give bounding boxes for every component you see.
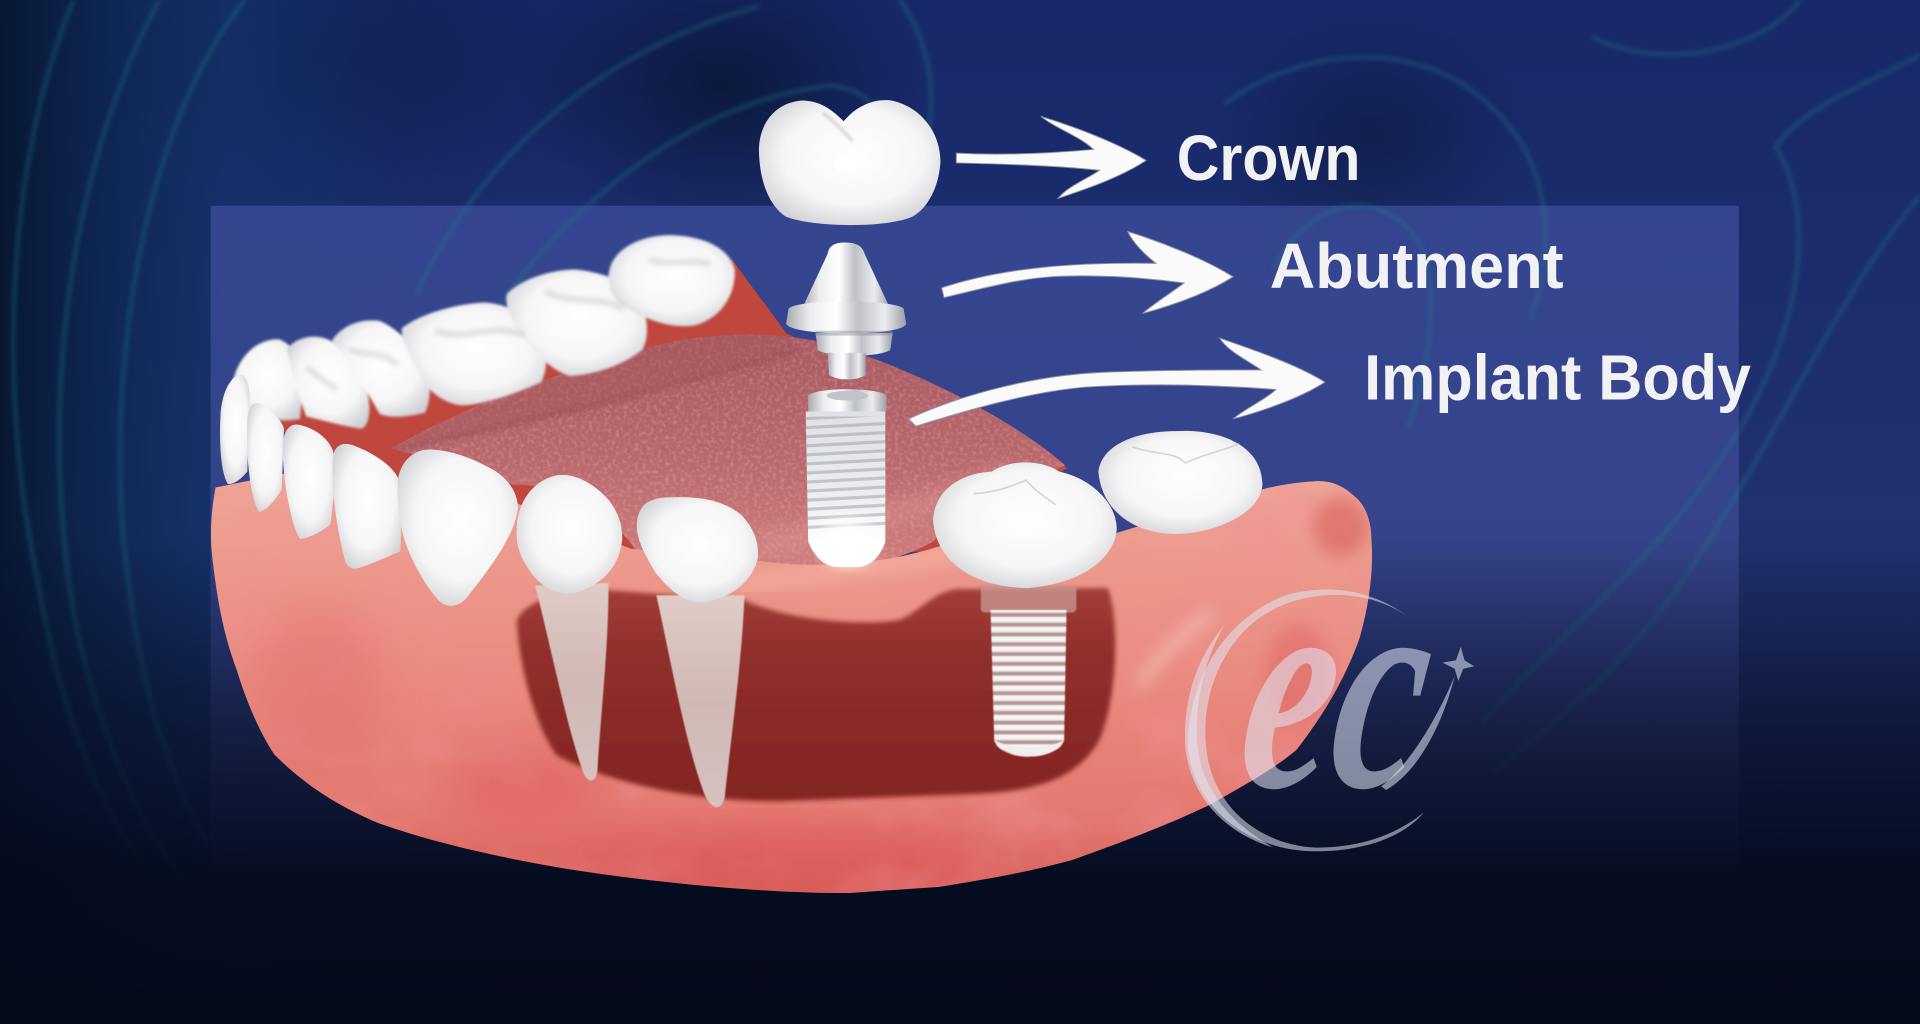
arrow: crown (956, 116, 1146, 198)
premolar one (517, 475, 622, 594)
crown on jaw implant (933, 462, 1117, 588)
logo watermark (1185, 525, 1474, 851)
lighter background panel (211, 206, 1739, 867)
back teeth row (231, 235, 735, 429)
distant molar (1098, 431, 1262, 534)
bottom dark fade (0, 539, 1920, 1024)
abutment (786, 243, 906, 379)
arrow: abutment (942, 232, 1233, 314)
inner gum behind teeth (245, 260, 1068, 563)
tongue (392, 334, 1066, 565)
dark red cutaway window (517, 588, 1115, 801)
tooth root right (656, 595, 744, 807)
exploded crown (759, 100, 940, 225)
canine (398, 449, 518, 606)
logo letters: ec (1225, 525, 1452, 851)
label: Abutment: Abutment (1270, 231, 1564, 302)
front teeth row (220, 375, 1262, 606)
implant in jaw (981, 585, 1076, 757)
premolar two (637, 497, 758, 603)
implant body (806, 389, 887, 567)
incisors (220, 375, 401, 569)
label: Implant Body: Implant Body (1364, 342, 1752, 413)
tooth root left (535, 583, 609, 781)
arrow: implant body (909, 338, 1325, 426)
gum body (196, 465, 1396, 906)
logo tail and star (1381, 647, 1474, 790)
label: Crown: Crown (1177, 123, 1360, 194)
